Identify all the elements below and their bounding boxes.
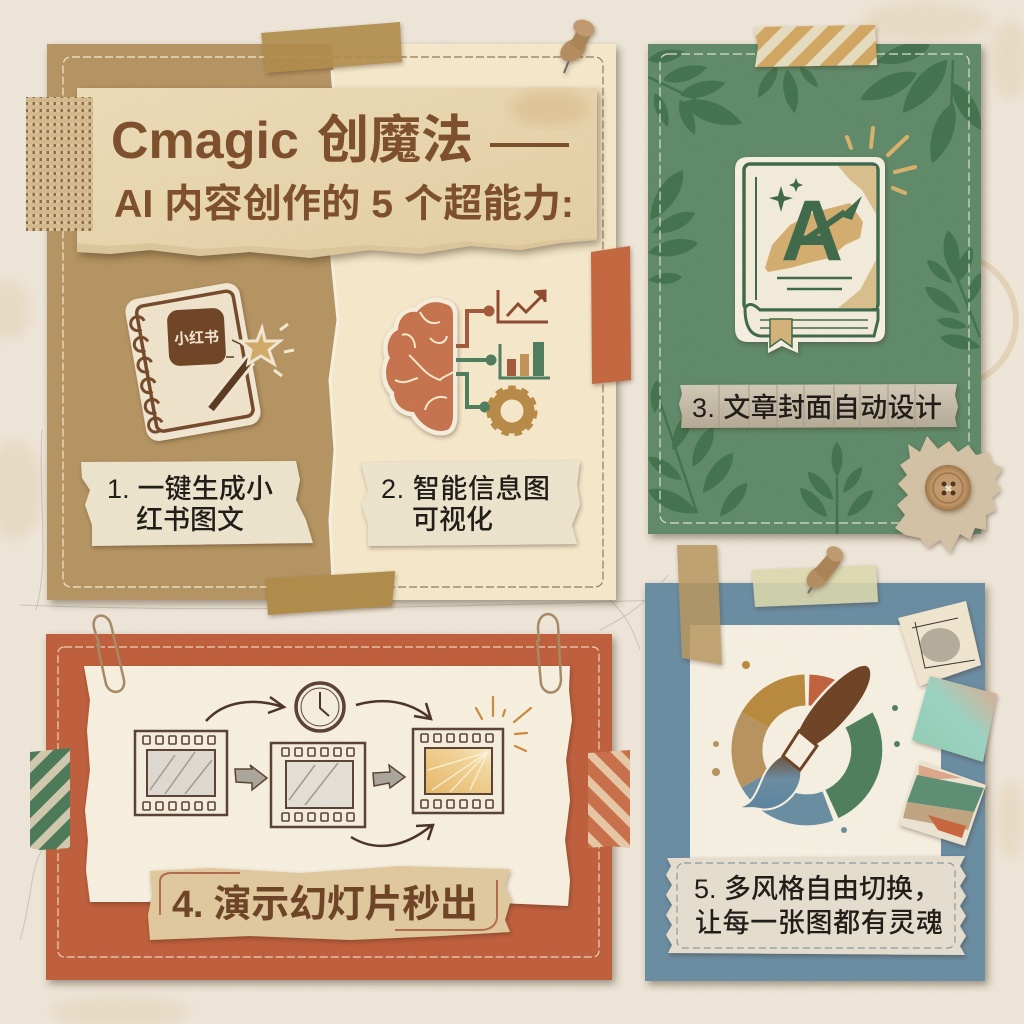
icon: film frame three, bright: [413, 729, 503, 813]
striped watercolour scrap: [899, 761, 986, 846]
title banner: [77, 88, 597, 258]
title line one: Cmagic: [111, 112, 299, 170]
panel 5: styles: [645, 543, 997, 981]
paperclip left: [94, 616, 124, 692]
colour wheel: [747, 690, 867, 810]
icon: film frame two: [271, 743, 365, 827]
label 4: [148, 866, 511, 940]
label 2: 可视化: [412, 505, 493, 535]
label 5: 5. 多风格自由切换，: [694, 874, 940, 904]
label 2: 2. 智能信息图: [381, 474, 550, 504]
arrow: curved bottom: [351, 825, 433, 846]
watercolour scrap: [912, 676, 997, 762]
panel 1 base: [47, 44, 616, 600]
bottom tape: [266, 571, 395, 615]
orange tape: [591, 246, 631, 384]
title line one: 创魔法: [317, 112, 473, 170]
label 1: 红书图文: [136, 505, 244, 535]
label 3: [679, 384, 958, 428]
label 2: [361, 461, 580, 546]
paperclip right: [537, 614, 561, 693]
paint swash: [765, 203, 863, 272]
panel 1: features one and two: [26, 17, 631, 615]
title line two: AI 内容创作的 5 个超能力:: [114, 183, 574, 226]
arrow: curved top right: [356, 701, 431, 719]
icon: notebook with magic wand: [123, 281, 294, 443]
icon: brain with charts: [386, 290, 550, 433]
letter A: A: [781, 183, 843, 279]
sketch scrap: [898, 601, 981, 686]
right washi tape: [588, 750, 630, 848]
icon: clock: [296, 683, 344, 731]
icon: paintbrush: [742, 666, 870, 808]
label 1: [81, 461, 313, 546]
sparkle rays: [847, 128, 915, 193]
icon: book cover: [735, 157, 885, 353]
label 3: 3. 文章封面自动设计: [692, 393, 942, 423]
arrow: curved top left: [206, 697, 284, 721]
burlap patch: [26, 97, 93, 231]
torn paper sheet: [84, 666, 572, 906]
botanical leaves: [642, 37, 989, 534]
label 1: 1. 一键生成小: [107, 474, 273, 504]
app badge: 小红书: [174, 328, 220, 348]
cream sheet: [690, 625, 941, 880]
icon: film frame one: [135, 731, 227, 815]
app badge: [167, 308, 226, 366]
arrow: block one: [235, 765, 267, 790]
panel 3: article cover: [642, 25, 1003, 553]
title dash: [490, 143, 569, 147]
top tape: [261, 22, 402, 73]
label 5: 让每一张图都有灵魂: [695, 908, 943, 938]
label 5: [666, 856, 966, 955]
gear: [490, 389, 534, 433]
tan tape: [677, 545, 722, 665]
left washi tape: [30, 748, 70, 850]
panel 4: slides: [30, 614, 630, 980]
bar chart: [500, 342, 550, 378]
line chart: [498, 290, 548, 322]
label 4: 4. 演示幻灯片秒出: [172, 884, 478, 926]
striped washi tape: [754, 25, 877, 67]
sun rays: [476, 697, 531, 751]
pushpin: [802, 543, 846, 593]
pale tape: [752, 565, 878, 607]
arrow: block two: [373, 765, 405, 788]
pushpin: [556, 17, 597, 73]
paint splatter: [712, 661, 900, 833]
fabric patch with button: [895, 436, 1003, 553]
